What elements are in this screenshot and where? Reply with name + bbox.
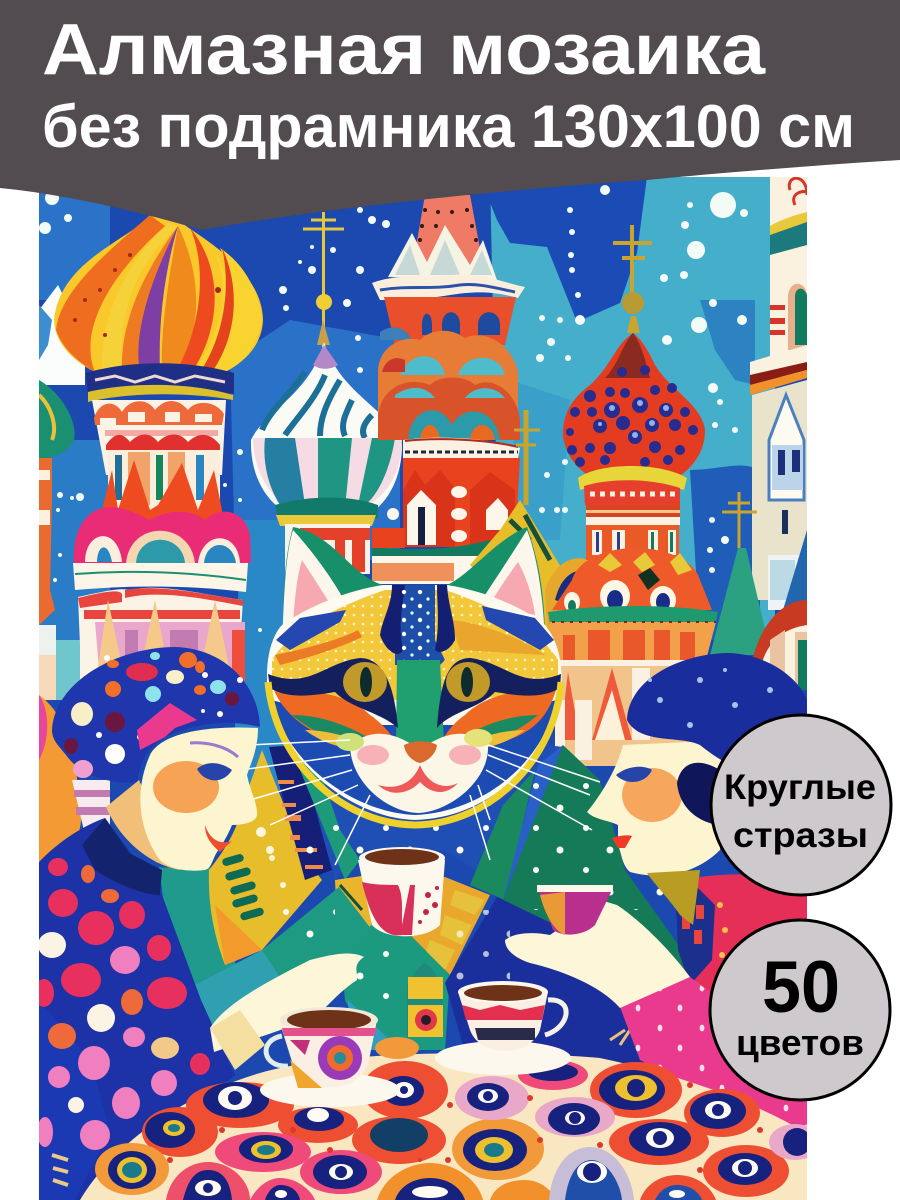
right woman hat and hair: [627, 653, 807, 790]
center teal robe: [340, 925, 450, 1050]
cup in right hand: [537, 885, 613, 935]
blue center robe: [315, 746, 562, 818]
cat muzzle: [350, 734, 488, 813]
table motifs: [95, 1037, 821, 1200]
panel: painting: [34, 177, 821, 1200]
gold fingers patch: [335, 876, 372, 926]
left tower: [73, 400, 251, 695]
cat cheeks: [274, 690, 392, 736]
whiskers: [240, 740, 600, 865]
small yellow lantern: [407, 963, 443, 1037]
right onion dome: [563, 225, 705, 476]
sky: [39, 177, 807, 1200]
teal left sleeve: [262, 887, 370, 976]
middle dome and spire: [251, 212, 402, 574]
header banner: [0, 0, 900, 230]
left woman collar: [82, 818, 162, 895]
badge: round rhinestones: стразы: [733, 816, 868, 855]
cat yellow ring: [268, 682, 561, 825]
dress dots: [34, 858, 210, 1075]
cat ears: [282, 527, 545, 625]
center cup: [358, 847, 445, 936]
left woman neck: [106, 780, 180, 870]
title: Алмазная мозаика: [42, 10, 766, 90]
left woman dress: [39, 818, 235, 1200]
cat nose: [404, 741, 437, 763]
navy stripe with dashes: [269, 745, 332, 880]
right tower: [548, 466, 718, 766]
cat eyes: [268, 658, 561, 728]
left woman: [34, 647, 364, 1200]
subtitle: без подрамника 130х100 см: [42, 93, 855, 160]
left woman hand: [210, 954, 364, 1052]
cat face: [267, 585, 562, 820]
right woman sleeve: [620, 977, 807, 1138]
yellow jacket: [209, 750, 322, 965]
badge: round rhinestones: Круглые: [724, 768, 876, 807]
right woman face: [587, 740, 730, 876]
left onion dome: [54, 215, 263, 402]
badge: 50 colours: цветов: [736, 1022, 864, 1063]
right edge buildings: [710, 177, 807, 690]
center tower: [372, 195, 525, 584]
badge: 50 colours: 50: [762, 947, 840, 1028]
light teal under-robe: [159, 867, 236, 1002]
right saucer and cup: [435, 981, 571, 1075]
robes under the cat: [159, 723, 688, 1063]
cat forehead stripes: [395, 585, 445, 665]
snow dots: [39, 185, 748, 632]
right woman hand: [505, 900, 690, 1008]
right woman: [505, 653, 807, 1138]
small gold cross and gold spire behind cat: [470, 410, 590, 650]
dots on robes: [306, 825, 489, 854]
table: [80, 1037, 821, 1200]
left edge teal dome and tower: [39, 380, 110, 870]
left saucer and cup: [260, 1007, 400, 1107]
cat head: [240, 527, 600, 865]
badge: 50 colours: [710, 920, 890, 1100]
navy block right: [445, 897, 644, 1063]
right woman dress: [673, 874, 807, 1130]
left woman hat: [52, 647, 260, 783]
left woman face: [140, 727, 258, 871]
badge: round rhinestones: [711, 715, 891, 895]
